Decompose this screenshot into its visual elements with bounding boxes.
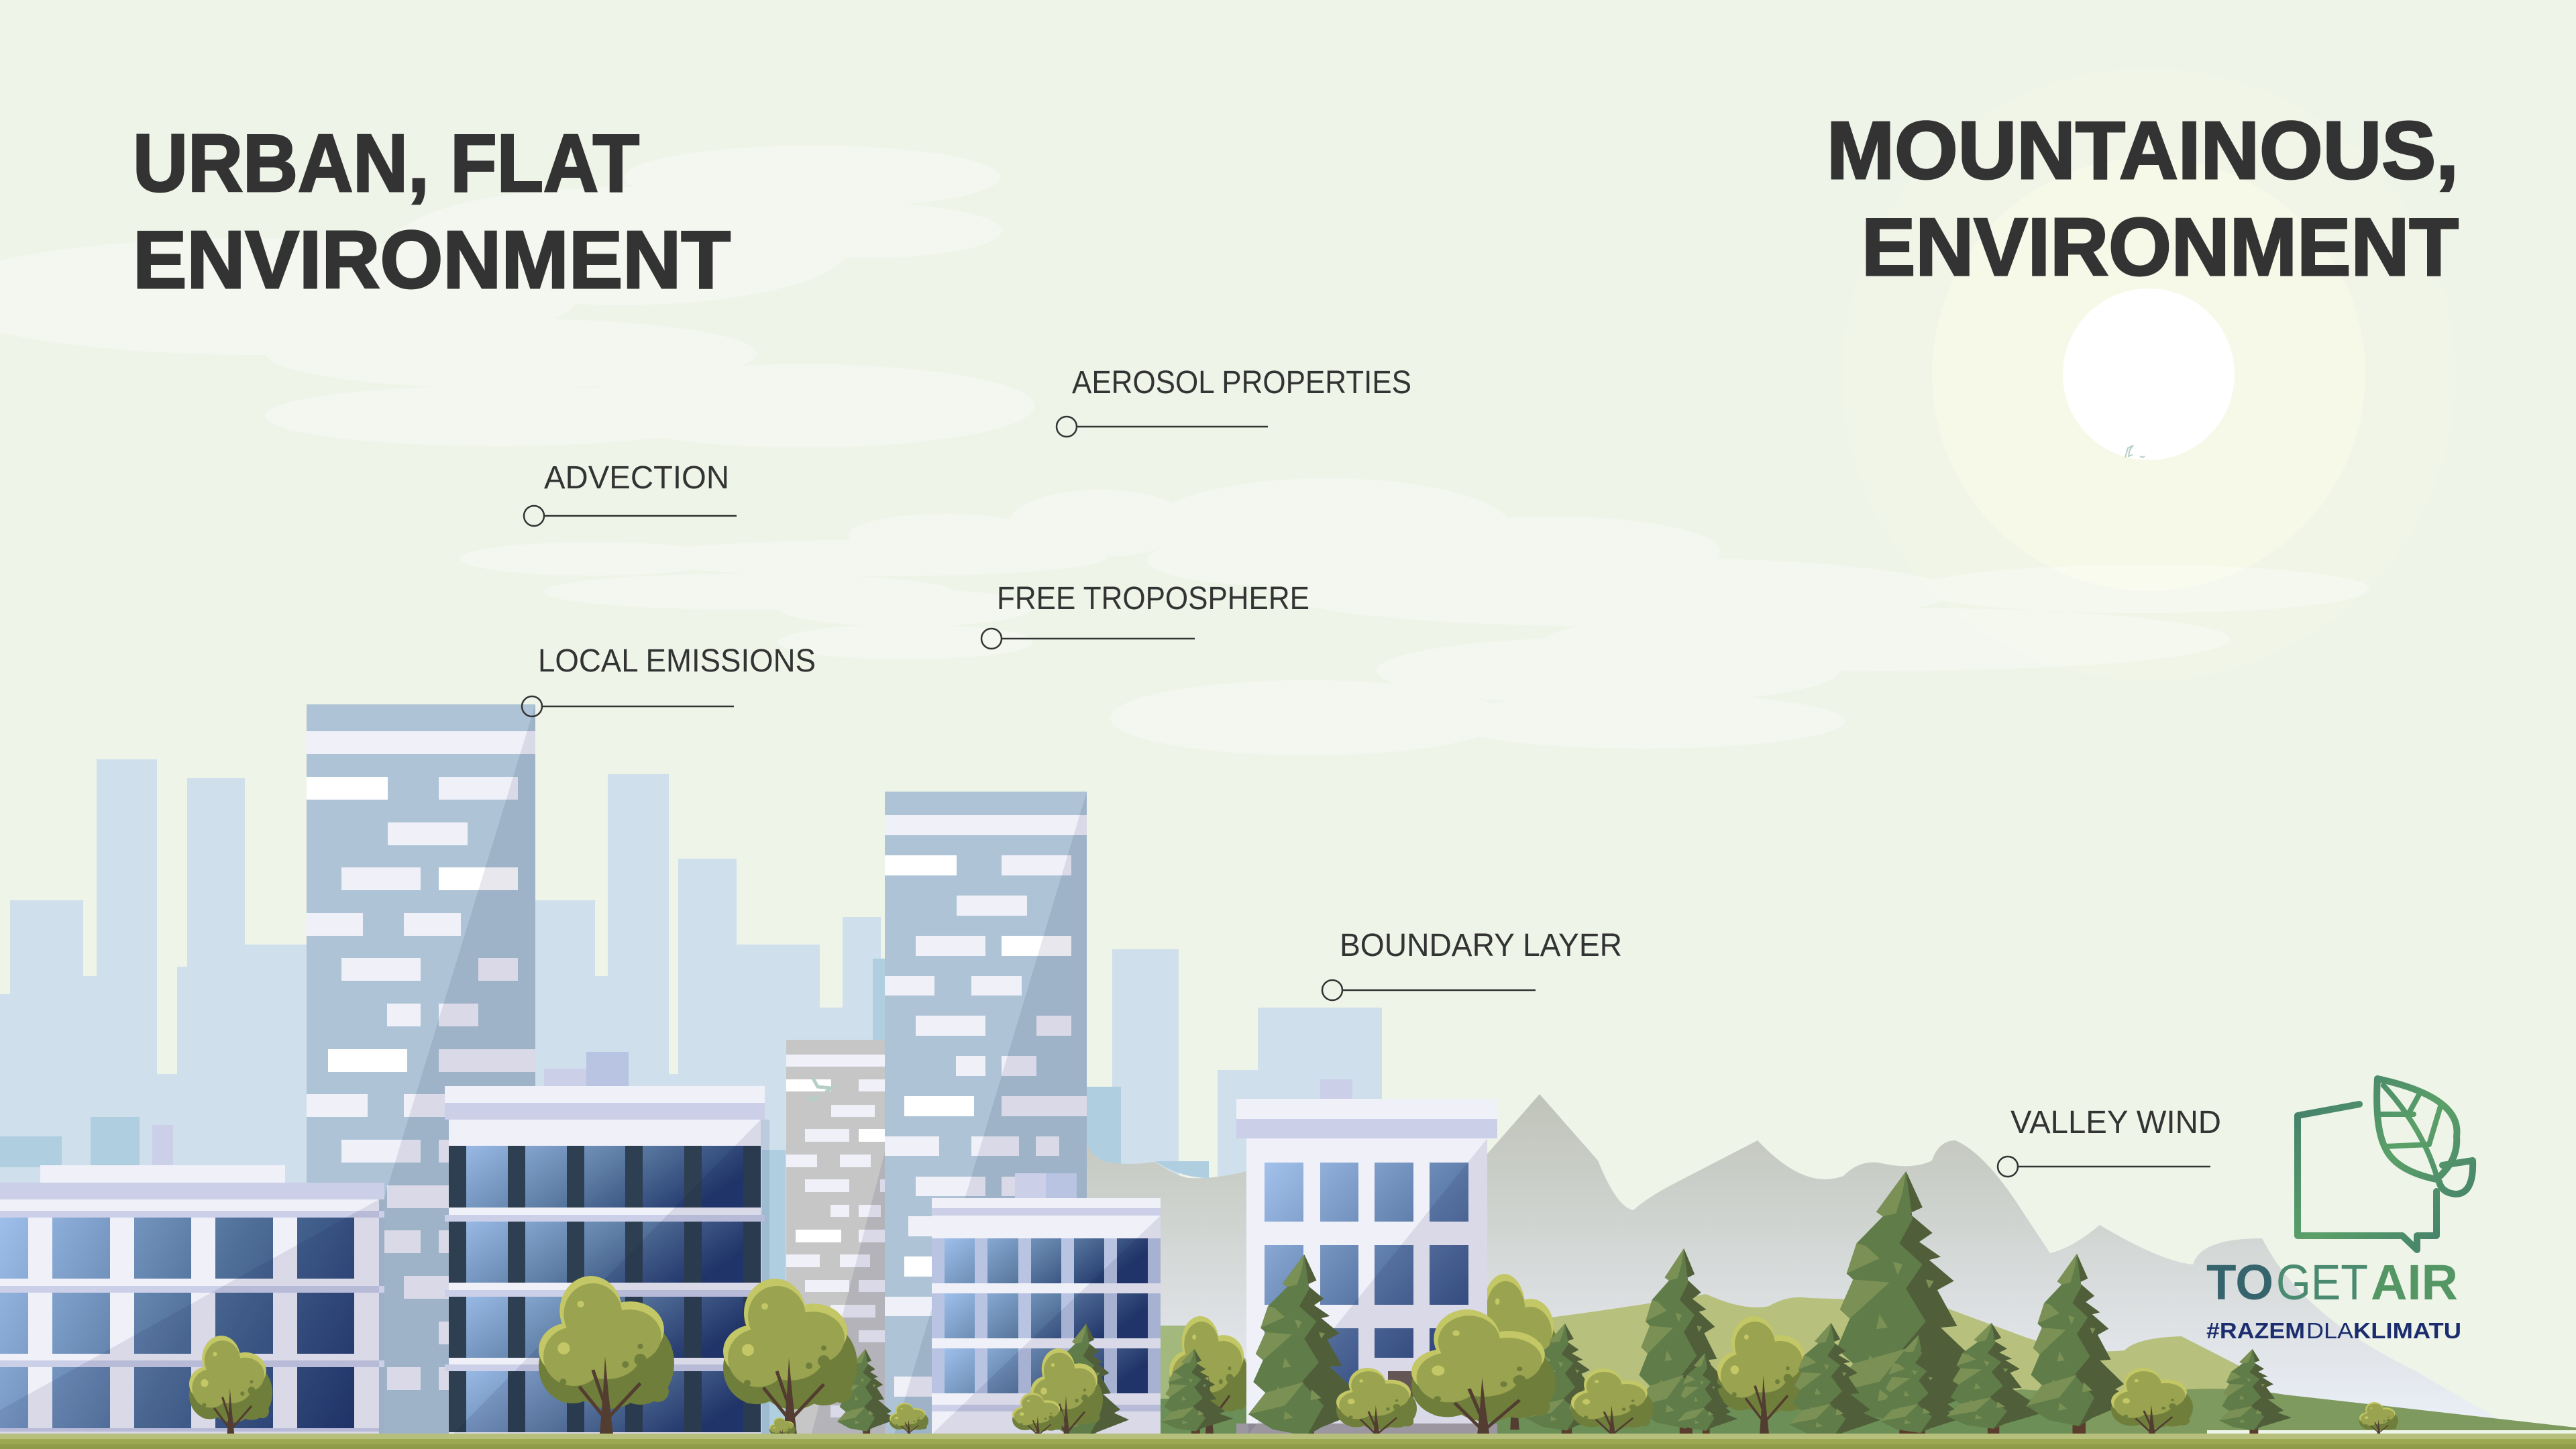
skyline fragment over mountains [1155, 1161, 1209, 1178]
label: free troposphere [981, 581, 1309, 649]
logo wordmark: GET [2276, 1254, 2368, 1310]
label: local emissions: LOCAL EMISSIONS [538, 643, 816, 679]
building front right [1236, 1079, 1497, 1434]
title: mountainous environment: MOUNTAINOUS, [1827, 105, 2459, 196]
grey building [786, 1040, 885, 1434]
clouds [0, 146, 2369, 755]
label: free troposphere: FREE TROPOSPHERE [997, 581, 1309, 616]
label: aerosol properties: AEROSOL PROPERTIES [1072, 365, 1411, 400]
hashtag [2206, 1318, 2461, 1343]
label: aerosol properties [1057, 365, 1411, 437]
icon: birds [808, 1077, 831, 1099]
hashtag: DLA [2306, 1318, 2353, 1343]
label: advection [524, 460, 737, 526]
building front middle [445, 1052, 769, 1434]
ground [0, 1434, 2576, 1449]
label: advection: ADVECTION [544, 460, 729, 496]
title: urban, flat environment: URBAN, FLAT [133, 117, 639, 209]
title: urban, flat environment [133, 117, 731, 305]
logo wordmark [2206, 1254, 2458, 1310]
logo wordmark: AIR [2371, 1254, 2458, 1310]
title: mountainous environment: ENVIRONMENT [1862, 201, 2459, 292]
deciduous trees and shrubs [189, 1276, 2398, 1444]
hashtag: #RAZEM [2206, 1318, 2305, 1343]
title: urban, flat environment: ENVIRONMENT [133, 214, 731, 305]
pine trees [837, 1171, 2292, 1446]
tower left with windows [307, 704, 535, 1434]
title: mountainous environment [1827, 105, 2459, 292]
background city skyline [0, 759, 1382, 1434]
hashtag: KLIMATU [2353, 1318, 2461, 1343]
background trees behind right building [1161, 1274, 1560, 1436]
tower center with windows [885, 792, 1087, 1434]
back mountains [1087, 1094, 2576, 1434]
icon: sun with halo [1842, 68, 2455, 681]
logo wordmark: TO [2206, 1254, 2273, 1310]
label: boundary layer: BOUNDARY LAYER [1340, 928, 1622, 963]
label: valley wind [1998, 1105, 2221, 1177]
label: local emissions [522, 643, 816, 716]
icon: speech bubble with leaf [2298, 1079, 2473, 1250]
building front left [0, 1165, 384, 1434]
building front center [932, 1173, 1161, 1434]
label: valley wind: VALLEY WIND [2010, 1105, 2221, 1140]
label: boundary layer [1322, 928, 1622, 1000]
logo: togetair [2206, 1079, 2473, 1343]
green hills [1161, 1294, 2576, 1434]
